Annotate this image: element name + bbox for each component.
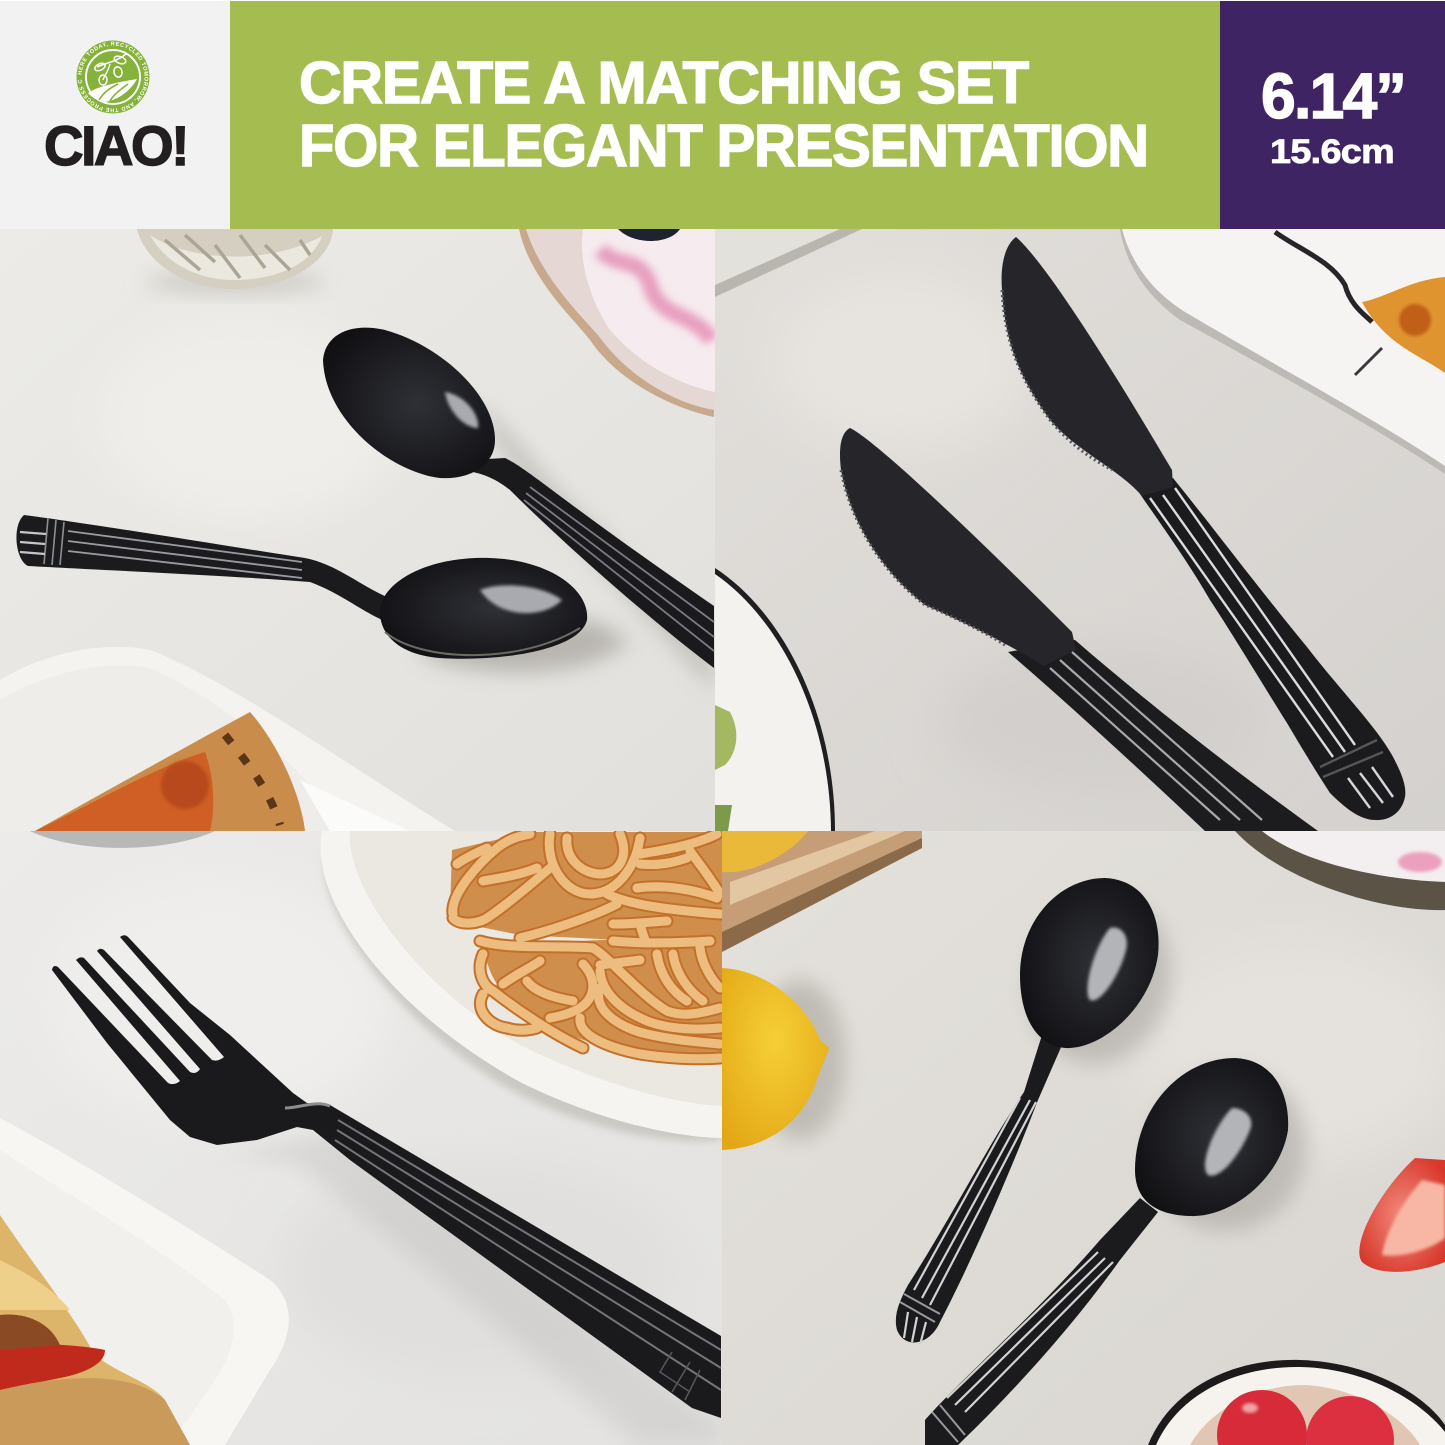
- bowl of tomatoes: [1148, 1360, 1445, 1445]
- header band: [0, 1, 1445, 229]
- book corner: [715, 229, 862, 297]
- grey dish edge: [30, 831, 215, 848]
- food: [1362, 277, 1445, 373]
- strawberry: [1359, 1158, 1445, 1272]
- marble plate: [1120, 229, 1445, 474]
- panel: photo of black spoons with lemon: [722, 831, 1445, 1445]
- panel: photo of two black spoons: [0, 229, 715, 831]
- spoon: lower: [16, 515, 587, 659]
- knife: lower left: [840, 428, 1318, 831]
- wooden box: [722, 831, 922, 952]
- title: CREATE A MATCHING SET: [299, 50, 1029, 116]
- title: FOR ELEGANT PRESENTATION: [299, 113, 1148, 179]
- panel: size: [1220, 1, 1445, 229]
- shadows: [1028, 908, 1178, 1070]
- panel: title band: [230, 1, 1220, 229]
- panel: logo: [0, 1, 230, 229]
- logo wordmark: CIAO!: [44, 114, 187, 177]
- title: [299, 50, 1148, 179]
- pizza plate: [0, 1118, 289, 1445]
- plate top right: [1235, 831, 1445, 910]
- icon: olive badge: [76, 40, 150, 114]
- panel: photo of two black knives: [715, 229, 1445, 831]
- spaghetti plate: [320, 831, 722, 1141]
- glass: [137, 229, 333, 294]
- knife: upper right: [1002, 237, 1405, 820]
- panel: photo of black fork: [0, 831, 722, 1445]
- size in inches: 6.14”: [1261, 60, 1405, 132]
- fork: [52, 935, 721, 1418]
- white plate left: [715, 568, 835, 831]
- spoon: upper: [323, 328, 714, 668]
- plate with pizza: [0, 647, 455, 831]
- plate with yogurt: [519, 229, 715, 417]
- size in centimetres: 15.6cm: [1270, 133, 1394, 171]
- lemon behind: [722, 831, 808, 872]
- fork shadow: [268, 1136, 716, 1444]
- lemon: [722, 968, 845, 1150]
- pizza: [0, 1215, 190, 1445]
- spoon: upper: [896, 878, 1159, 1345]
- spoon: lower: [925, 1058, 1288, 1445]
- shadows: [488, 408, 715, 684]
- spaghetti: [450, 832, 722, 1062]
